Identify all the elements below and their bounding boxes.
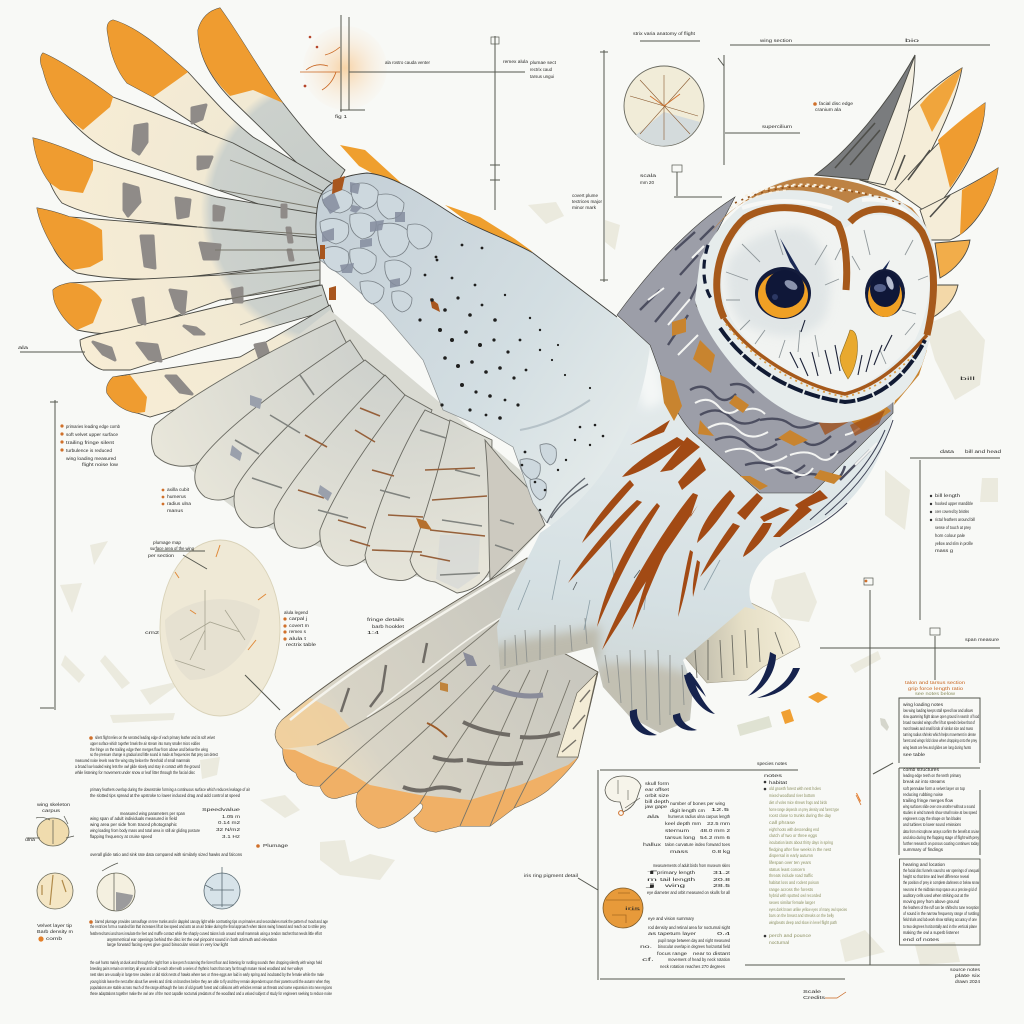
diagram: sun dial top left xyxy=(300,15,525,119)
legend: wing circle: 1:4 xyxy=(367,630,380,635)
text block: right bill notes: cere covered by bristles xyxy=(935,509,970,514)
callout: right labels: talon and tarsus section xyxy=(905,680,966,685)
text block: bottom paragraphs: the rectrices form a rounded fan that increases lift at low speed and acts as an air brake during the final approach when talons swing forward and reach out to strike prey xyxy=(90,924,327,929)
left side rules and labels: wing loading measured xyxy=(66,456,117,461)
text: anatomy table: measurements of adult birds from museum skins xyxy=(653,863,731,868)
text block: right bill notes: mass g xyxy=(935,548,954,553)
list: species notes: wingbeats deep and slow in level flight path xyxy=(769,920,837,925)
list: species notes: clutch of two or three eggs xyxy=(769,833,818,838)
box: note three: height so that time and level difference reveal xyxy=(903,874,969,879)
left eye xyxy=(755,267,811,319)
box: note three: neurons in the midbrain map space as a precise grid of xyxy=(903,887,978,892)
text: anatomy table: digit length cm xyxy=(670,808,705,813)
secondary backing xyxy=(165,310,545,585)
callouts: top right: supercilium xyxy=(762,124,792,129)
panel: lower right notes xyxy=(524,590,980,980)
dark fold near flank xyxy=(547,478,588,523)
list: species notes: range across the forests xyxy=(769,887,814,892)
black collar xyxy=(720,328,925,402)
covert lower outline xyxy=(320,260,547,523)
owl head xyxy=(695,177,937,423)
fur lines xyxy=(726,230,928,364)
background paper fragments xyxy=(60,202,998,965)
list: species notes: bars on the breast and streaks on the belly xyxy=(769,913,835,918)
text block: right bill notes: bill length xyxy=(935,493,961,498)
header text and rule xyxy=(633,31,990,45)
box: note three xyxy=(900,859,980,945)
text: anatomy table xyxy=(637,781,731,895)
box: note two: and also during the flapping stage of flight with prey xyxy=(903,835,980,840)
legend: wing circle: alula t xyxy=(289,636,307,641)
box: note two: further research on porous coating continues today xyxy=(903,841,980,846)
text: second table: movement of head by neck rotation xyxy=(668,957,730,962)
callouts: top right xyxy=(640,55,854,197)
text block: bottom paragraphs: asymmetrical ear openings behind the disc let the owl pinpoint sound in both azimuth and elevation xyxy=(107,937,277,942)
cream outer tail feather xyxy=(557,673,597,757)
list: species notes: fledging after five weeks in the nest xyxy=(769,847,832,852)
list: species notes: habitat loss and rodent poison xyxy=(769,880,819,885)
text: anatomy table: 31.2 xyxy=(713,870,731,875)
text: anatomy table: sternum xyxy=(665,828,689,833)
small circle diagrams row: comb xyxy=(46,936,63,941)
list: species notes: home range depends on prey density and forest type xyxy=(769,807,839,812)
list: species notes: hybrid with spotted owl recorded xyxy=(769,893,821,898)
text: second table: focus range xyxy=(657,951,688,956)
text: anatomy table: ear offset xyxy=(645,787,670,792)
list: species notes: old growth forest with nest holes xyxy=(769,786,822,791)
list: species notes: sexes similar female larger xyxy=(769,900,815,905)
callout: right labels xyxy=(820,376,1002,805)
claws xyxy=(630,652,800,735)
left side rules and labels: turbulence is reduced xyxy=(66,448,113,453)
wing coverts and shoulder xyxy=(316,173,672,532)
box: note one: low wing loading keeps stall speed low and allows xyxy=(903,708,974,713)
list: species notes xyxy=(757,761,848,945)
callout: right labels: bill xyxy=(960,376,975,381)
text block: right bill notes xyxy=(930,493,975,553)
text block: table: Speed xyxy=(202,807,223,812)
list: species notes: notes xyxy=(764,773,783,778)
text block: right bill notes: sense of touch at prey xyxy=(935,525,972,530)
text: second table: near to distant xyxy=(693,951,731,956)
right eye xyxy=(865,269,905,317)
text block: right bill notes: yellow and slim in profile xyxy=(935,541,973,546)
text: anatomy table: keel depth mm xyxy=(665,821,701,826)
box: note three: to two degrees horizontally and in the vertical plane xyxy=(903,924,977,929)
text: anatomy table: jaw gape xyxy=(644,804,668,809)
text block: right bill notes: horn colour pale xyxy=(935,533,966,538)
box: note one: broad rounded wings offer lift at speeds below that of xyxy=(903,720,976,725)
legend: wing circle: carpal j xyxy=(289,616,307,621)
tail fan xyxy=(275,558,598,832)
neck and head back mottling xyxy=(617,197,927,493)
text block: lower left paragraphs xyxy=(75,735,250,798)
left side rules and labels xyxy=(18,345,192,710)
list: species notes: habitat xyxy=(769,780,788,785)
callout: right labels: see notes below xyxy=(915,691,956,696)
box: note two: reducing rubbing noise xyxy=(903,792,943,797)
text: anatomy table: bill depth xyxy=(645,799,670,804)
text block: bottom paragraphs: populations are stable across much of the range although the loss of old growth forest and collisions with vehicles remain as threats and some expansion into new regions xyxy=(90,985,333,990)
callout: centre label xyxy=(572,193,603,210)
text block: lower left paragraphs: measured noise levels near the wing stay below the threshold of small mammals xyxy=(75,758,191,763)
box: note one: forest and wings fold close when dropping onto the prey xyxy=(903,738,978,743)
legend: wing circle: fringe details xyxy=(367,617,405,622)
text block: table: flapping frequency at cruise speed xyxy=(90,834,153,839)
diagram: top circle xyxy=(600,50,704,282)
upper left wing xyxy=(33,8,672,593)
text block: table: 3.1 Hz xyxy=(222,834,240,839)
box: note three: auditory cells used when striking out at the xyxy=(903,893,969,898)
text: second table: 0.4 xyxy=(717,931,731,936)
box: note one: turning radius shrinks which helps movement in dense xyxy=(903,732,976,737)
text block: bottom paragraphs: breeding pairs remain on territory all year and call to each other with a series of rhythmic hoots that carry far through mature mixed woodland and river valleys xyxy=(90,966,304,971)
callout: top centre column: tarsus ungui xyxy=(530,74,554,79)
small diagram: anatomy ellipse xyxy=(25,802,74,846)
box: note two: trailing fringe merges flow xyxy=(903,798,954,803)
icon: orange circle xyxy=(603,888,643,928)
text block: table: overall glide ratio and sink rate data compared with similarly sized hawks and falcons xyxy=(90,852,243,857)
box: note one: wing beats are few and glides are long during hunts xyxy=(903,745,972,750)
text block: lower left paragraphs: primary feathers overlap during the downstroke forming a continuous surface which reduces leakage of air xyxy=(90,787,250,792)
text: anatomy table: 12.5 xyxy=(711,807,730,812)
text block: bottom paragraphs: feathered tarsi and toes insulate the feet and muffle contact while the sharply curved talons lock around small mammals using a tendon ratchet that needs little effort xyxy=(90,931,323,936)
small circle diagrams row: Barb density m xyxy=(37,929,73,934)
legend: wing circle: covert m xyxy=(289,623,309,628)
box: note two: comb structures xyxy=(903,767,940,772)
facial disc xyxy=(721,210,929,392)
box: note one: see table xyxy=(903,752,926,757)
text: bottom right caption xyxy=(803,967,981,1000)
left side rules and labels: flight noise low xyxy=(82,462,119,467)
left side rules and labels: soft velvet upper surface xyxy=(66,432,119,437)
box: note one: slow quartering flight above open ground in search of food xyxy=(903,714,979,719)
diagram: large wing circle xyxy=(145,540,280,716)
text block: table: Plumage xyxy=(263,843,289,848)
list: species notes: diet of voles mice shrews frogs and birds xyxy=(769,800,828,805)
text block: table: 0.14 m2 xyxy=(218,820,241,825)
box: note three: end of notes xyxy=(903,937,940,942)
list: species notes: species notes xyxy=(757,761,788,766)
text: anatomy table: talon curvature index forward toes xyxy=(665,842,731,847)
text block: bottom paragraphs: large forward facing eyes give good binocular vision in very low light xyxy=(107,942,229,947)
callout: top centre column: rectrix caud xyxy=(530,67,553,72)
list: species notes: roost close to trunks during the day xyxy=(769,813,832,818)
text: anatomy table: humerus radius ulna carpus length xyxy=(668,814,731,819)
callout: centre label: minor mark xyxy=(572,205,597,210)
owl body xyxy=(497,345,893,733)
diagram: sun dial top left: fig 1 xyxy=(335,114,348,119)
eyebrows xyxy=(780,238,810,292)
legend: wing circle: barb hooklet xyxy=(372,624,405,629)
text block: table: wing span of adult individuals measured in field xyxy=(90,816,178,821)
text block: bottom paragraphs: these adaptations together make the owl one of the most capable nocturnal predators of the woodland and a valued subject of study for engineers seeking to reduce noise xyxy=(90,991,332,996)
owl right foot xyxy=(683,600,800,683)
breast streaks xyxy=(568,420,828,650)
callouts: top right: scala xyxy=(640,173,657,178)
legend: wing circle xyxy=(283,610,405,647)
beak xyxy=(840,330,857,379)
upper wing edge xyxy=(340,145,533,252)
text: second table: as xyxy=(648,931,657,936)
diagram: sun dial top left: ala rostro cauda venter xyxy=(385,60,431,65)
text block: table: measured wing parameters per span xyxy=(120,811,185,816)
crown xyxy=(712,177,928,232)
callout: centre label: tectrices major xyxy=(572,199,603,204)
box: note one: wing loading notes xyxy=(903,702,944,707)
text: bottom right caption: drawn 2024 xyxy=(955,979,981,984)
text: bottom right caption: source notes xyxy=(950,967,981,972)
text block: table: value xyxy=(222,807,241,812)
secondary bars xyxy=(230,375,514,575)
callout: right labels: data xyxy=(940,449,955,454)
label: pointer: iris ring pigment detail xyxy=(524,873,578,878)
callout: top centre column xyxy=(490,36,557,210)
box: note three: hearing and location xyxy=(903,862,946,867)
facial ring xyxy=(717,208,847,318)
text: anatomy table: 22.5 mm xyxy=(707,821,730,826)
text block: right bill notes: rictal feathers around bill xyxy=(935,517,975,522)
text block: lower left paragraphs: the slotted tips spread at the upstroke to lower induced drag and add control at speed xyxy=(90,793,240,798)
small circle diagrams row xyxy=(37,863,240,942)
text: second table: eye and vision summary xyxy=(648,916,695,921)
box: note two: engineers copy the shape on fan blades xyxy=(903,816,962,821)
text: second table: tapetum layer xyxy=(658,931,697,936)
header text and rule: strix varia anatomy of flight xyxy=(633,31,696,36)
covert scallops xyxy=(320,183,556,500)
text: anatomy table: tarsus long xyxy=(665,835,696,840)
text block: lower left paragraphs: upper surface which together break the air stream into many smaller micro eddies xyxy=(90,741,201,746)
list: species notes: threats include road traffic xyxy=(769,873,814,878)
box: note two: and turbines to lower sound emissions xyxy=(903,822,962,827)
pointer to orange circle xyxy=(578,878,598,890)
left side rules and labels: trailing fringe silent xyxy=(66,440,115,445)
legend: wing circle: remex s xyxy=(289,629,307,634)
box: note two: summary of findings xyxy=(903,847,944,852)
icon: head sketch xyxy=(605,776,641,815)
left side rules and labels: axilla cubit xyxy=(167,487,190,492)
fallen flakes xyxy=(737,692,889,802)
text: bottom right caption: Scale xyxy=(803,989,822,994)
disc shading xyxy=(726,228,830,336)
header text and rule: wing section xyxy=(760,38,793,43)
box: note two: studies in wind tunnels show small noise at low speed xyxy=(903,810,977,815)
orange tips xyxy=(283,749,578,832)
text block: bottom paragraphs xyxy=(89,919,333,996)
list: species notes: call phrase xyxy=(769,820,796,825)
callout: right labels: bill and head xyxy=(965,449,1002,454)
feather bars xyxy=(93,105,297,425)
text: anatomy table: skull form xyxy=(645,781,669,786)
text: anatomy table: tail length xyxy=(660,877,696,882)
small diagram: anatomy ellipse: carpus xyxy=(42,808,61,813)
callout: right labels: span measure xyxy=(965,637,1000,642)
left side rules and labels: manus xyxy=(167,508,184,513)
text: anatomy table: hallux xyxy=(643,842,662,847)
text: anatomy table: m xyxy=(647,877,658,882)
callout: top centre column: remex alula xyxy=(503,59,529,64)
text block: bottom paragraphs: barred plumage provides camouflage on tree trunks and in dappled canopy light while contrasting tips on primaries and secondaries mark the pattern of moult and age xyxy=(95,919,328,924)
text: anatomy table: 20.8 xyxy=(713,877,731,882)
text: anatomy table: ala xyxy=(647,814,660,819)
small diagram: anatomy ellipse: ulna xyxy=(25,837,36,842)
text: bottom right caption: Credits xyxy=(803,995,826,1000)
text: anatomy table: j xyxy=(637,883,657,888)
text: anatomy table: 0.8 kg xyxy=(712,849,731,854)
text: second table: pupil range between day and night measured xyxy=(658,938,730,943)
list: species notes: eight hoots with descending end xyxy=(769,827,819,832)
text: anatomy table: number of bones per wing xyxy=(670,801,726,806)
tail feather separators xyxy=(317,617,570,826)
list: species notes: status least concern xyxy=(769,867,806,872)
left side rules and labels: primaries leading edge comb xyxy=(66,424,121,429)
box: note two: break air into streams xyxy=(903,779,946,784)
left side rules and labels: ala xyxy=(18,345,29,350)
left side rules and labels: radius ulna xyxy=(167,501,192,506)
text block: table: wing area per side from traced photographic xyxy=(90,822,178,827)
text: anatomy table: wing xyxy=(665,883,686,888)
legend: wing circle: alula legend xyxy=(284,610,309,615)
text block: bottom paragraphs: nest sites are usually in large tree cavities or old stick nests of hawks where two or three eggs are laid in early spring and incubated by the female while the male xyxy=(90,972,324,977)
tail silhouette xyxy=(275,558,598,832)
callouts: top right: cranium ala xyxy=(815,107,842,112)
text block: bottom paragraphs: the owl hunts mainly at dusk and through the night from a low perch scanning the forest floor and listening for rustling sounds then dropping silently with wings held xyxy=(90,960,322,965)
text block: table: 32 N/m2 xyxy=(216,827,241,832)
text: anatomy table: orbit size xyxy=(645,793,670,798)
box: note two: soft pennulae form a velvet layer on top xyxy=(903,786,965,791)
text block: table xyxy=(90,807,289,857)
box: note two: wing surfaces slide over one another without a sound xyxy=(903,804,975,809)
callout: top centre column: plumae sect xyxy=(530,60,557,65)
diagram: large wing circle: cm2 xyxy=(145,630,160,635)
text: anatomy table: 54.2 mm 6 xyxy=(700,835,731,840)
tail bars xyxy=(341,643,560,791)
list: species notes: eyes dark brown unlike yellow eyes of many owl species xyxy=(769,907,848,912)
text: anatomy table: mass xyxy=(670,849,689,854)
box: note one: most hawks and small birds of similar size and mass xyxy=(903,726,974,731)
header text and rule: bio xyxy=(905,38,920,43)
legend: wing circle: rectrix table xyxy=(286,642,317,647)
far wing behind head xyxy=(815,55,998,318)
text block: lower left paragraphs: while listening for movement under snow or leaf litter through the facial disc xyxy=(75,770,196,775)
text block: lower left paragraphs: the fringe on the trailing edge then merges flow from above and below the wing xyxy=(90,747,208,752)
box: note three: the feathers of the ruff can be shifted to tune reception xyxy=(903,905,979,910)
list: species notes: lifespan over ten years xyxy=(769,860,812,865)
small circle diagrams row: Velvet layer tip xyxy=(37,923,73,928)
box: note one xyxy=(899,698,980,768)
leg fur xyxy=(490,350,783,740)
text: anatomy table: primary length xyxy=(657,870,696,875)
box: note three: moving prey from above ground xyxy=(903,899,959,904)
white brow band xyxy=(742,200,917,224)
diagram: large wing circle: per section xyxy=(148,553,175,558)
text: second table: no. xyxy=(640,944,652,949)
text block: right bill notes: hooked upper mandible xyxy=(935,501,973,506)
left side rules and labels: humerus xyxy=(167,494,187,499)
text block: table: 1.05 m xyxy=(222,814,240,819)
text: anatomy table: eye diameter and orbit measured on skulls for all xyxy=(647,890,730,895)
box: note three: the position of prey in complete darkness or below snow xyxy=(903,880,980,885)
list: species notes: perch and pounce xyxy=(769,933,812,938)
dark flank lines xyxy=(780,420,893,547)
list: species notes: nocturnal xyxy=(769,940,789,945)
small diagram: anatomy ellipse: wing skeleton xyxy=(37,802,71,807)
box: note three: of sound in the narrow frequency range of rustling xyxy=(903,911,979,916)
callout: right labels: grip force length ratio xyxy=(908,686,964,691)
box: note three: field trials and lab work show striking accuracy of one xyxy=(903,917,977,922)
black speckles xyxy=(418,244,604,511)
box: note three: the facial disc funnels sound to ear openings of unequal xyxy=(903,868,979,873)
primary shafts xyxy=(197,160,325,325)
primary feathers xyxy=(33,8,345,417)
list: species notes: dispersal in early autumn xyxy=(769,853,814,858)
text: anatomy table: f xyxy=(647,870,663,875)
grey covert blotches xyxy=(322,182,405,288)
head base xyxy=(695,177,937,423)
text block: lower left paragraphs: a broad low loaded wing lets the owl glide slowly and stay in contact with the ground xyxy=(75,764,200,769)
diagram: large wing circle: surface area of the wing xyxy=(150,546,195,551)
box: note two: data from microphone arrays confirm the benefit at cruise xyxy=(903,829,979,834)
text: second table xyxy=(640,916,731,969)
white strip on long tail feather xyxy=(290,570,515,720)
secondary feathers xyxy=(152,320,545,593)
box: note two: leading edge teeth on the tenth primary xyxy=(903,773,962,778)
callout: centre label: covert plume xyxy=(572,193,599,198)
icon: orange circle: iris xyxy=(625,906,642,911)
text: second table: rod density and retinal area for nocturnal sight xyxy=(648,925,731,930)
text block: lower left paragraphs: so the pressure change is gradual and little sound is made at frequencies that prey can detect xyxy=(90,752,219,757)
text: second table: cf. xyxy=(642,957,654,962)
text block: bottom paragraphs: young birds leave the nest after about five weeks and climb on branches before they are able to fly and they remain dependent upon their parents until the autumn when they xyxy=(90,979,331,984)
text: bottom right caption: plate six xyxy=(955,973,981,978)
list: species notes: incubation lasts about thirty days in spring xyxy=(769,840,833,845)
covert upper outline xyxy=(316,173,617,317)
text: anatomy table: 48.0 mm 2 xyxy=(700,828,731,833)
box: note two xyxy=(899,767,980,855)
text: anatomy table: 28.5 xyxy=(713,883,731,888)
callouts: top right: facial disc edge xyxy=(819,101,854,106)
text block: table: wing loading from body mass and total area in still air gliding posture xyxy=(90,828,200,833)
text: second table: binocular overlap in degrees horizontal field xyxy=(658,944,730,949)
text block: lower left paragraphs: silent flight relies on the serrated leading edge of each primary feather and its soft velvet xyxy=(95,735,216,740)
box: note three: making the owl a superb listener xyxy=(903,930,959,935)
callouts: top right: mm 20 xyxy=(640,180,655,185)
list: species notes: mixed woodland river bottom xyxy=(769,793,815,798)
text: second table: neck rotation reaches 270 degrees xyxy=(660,964,726,969)
diagram: large wing circle: plumage map xyxy=(153,540,182,545)
